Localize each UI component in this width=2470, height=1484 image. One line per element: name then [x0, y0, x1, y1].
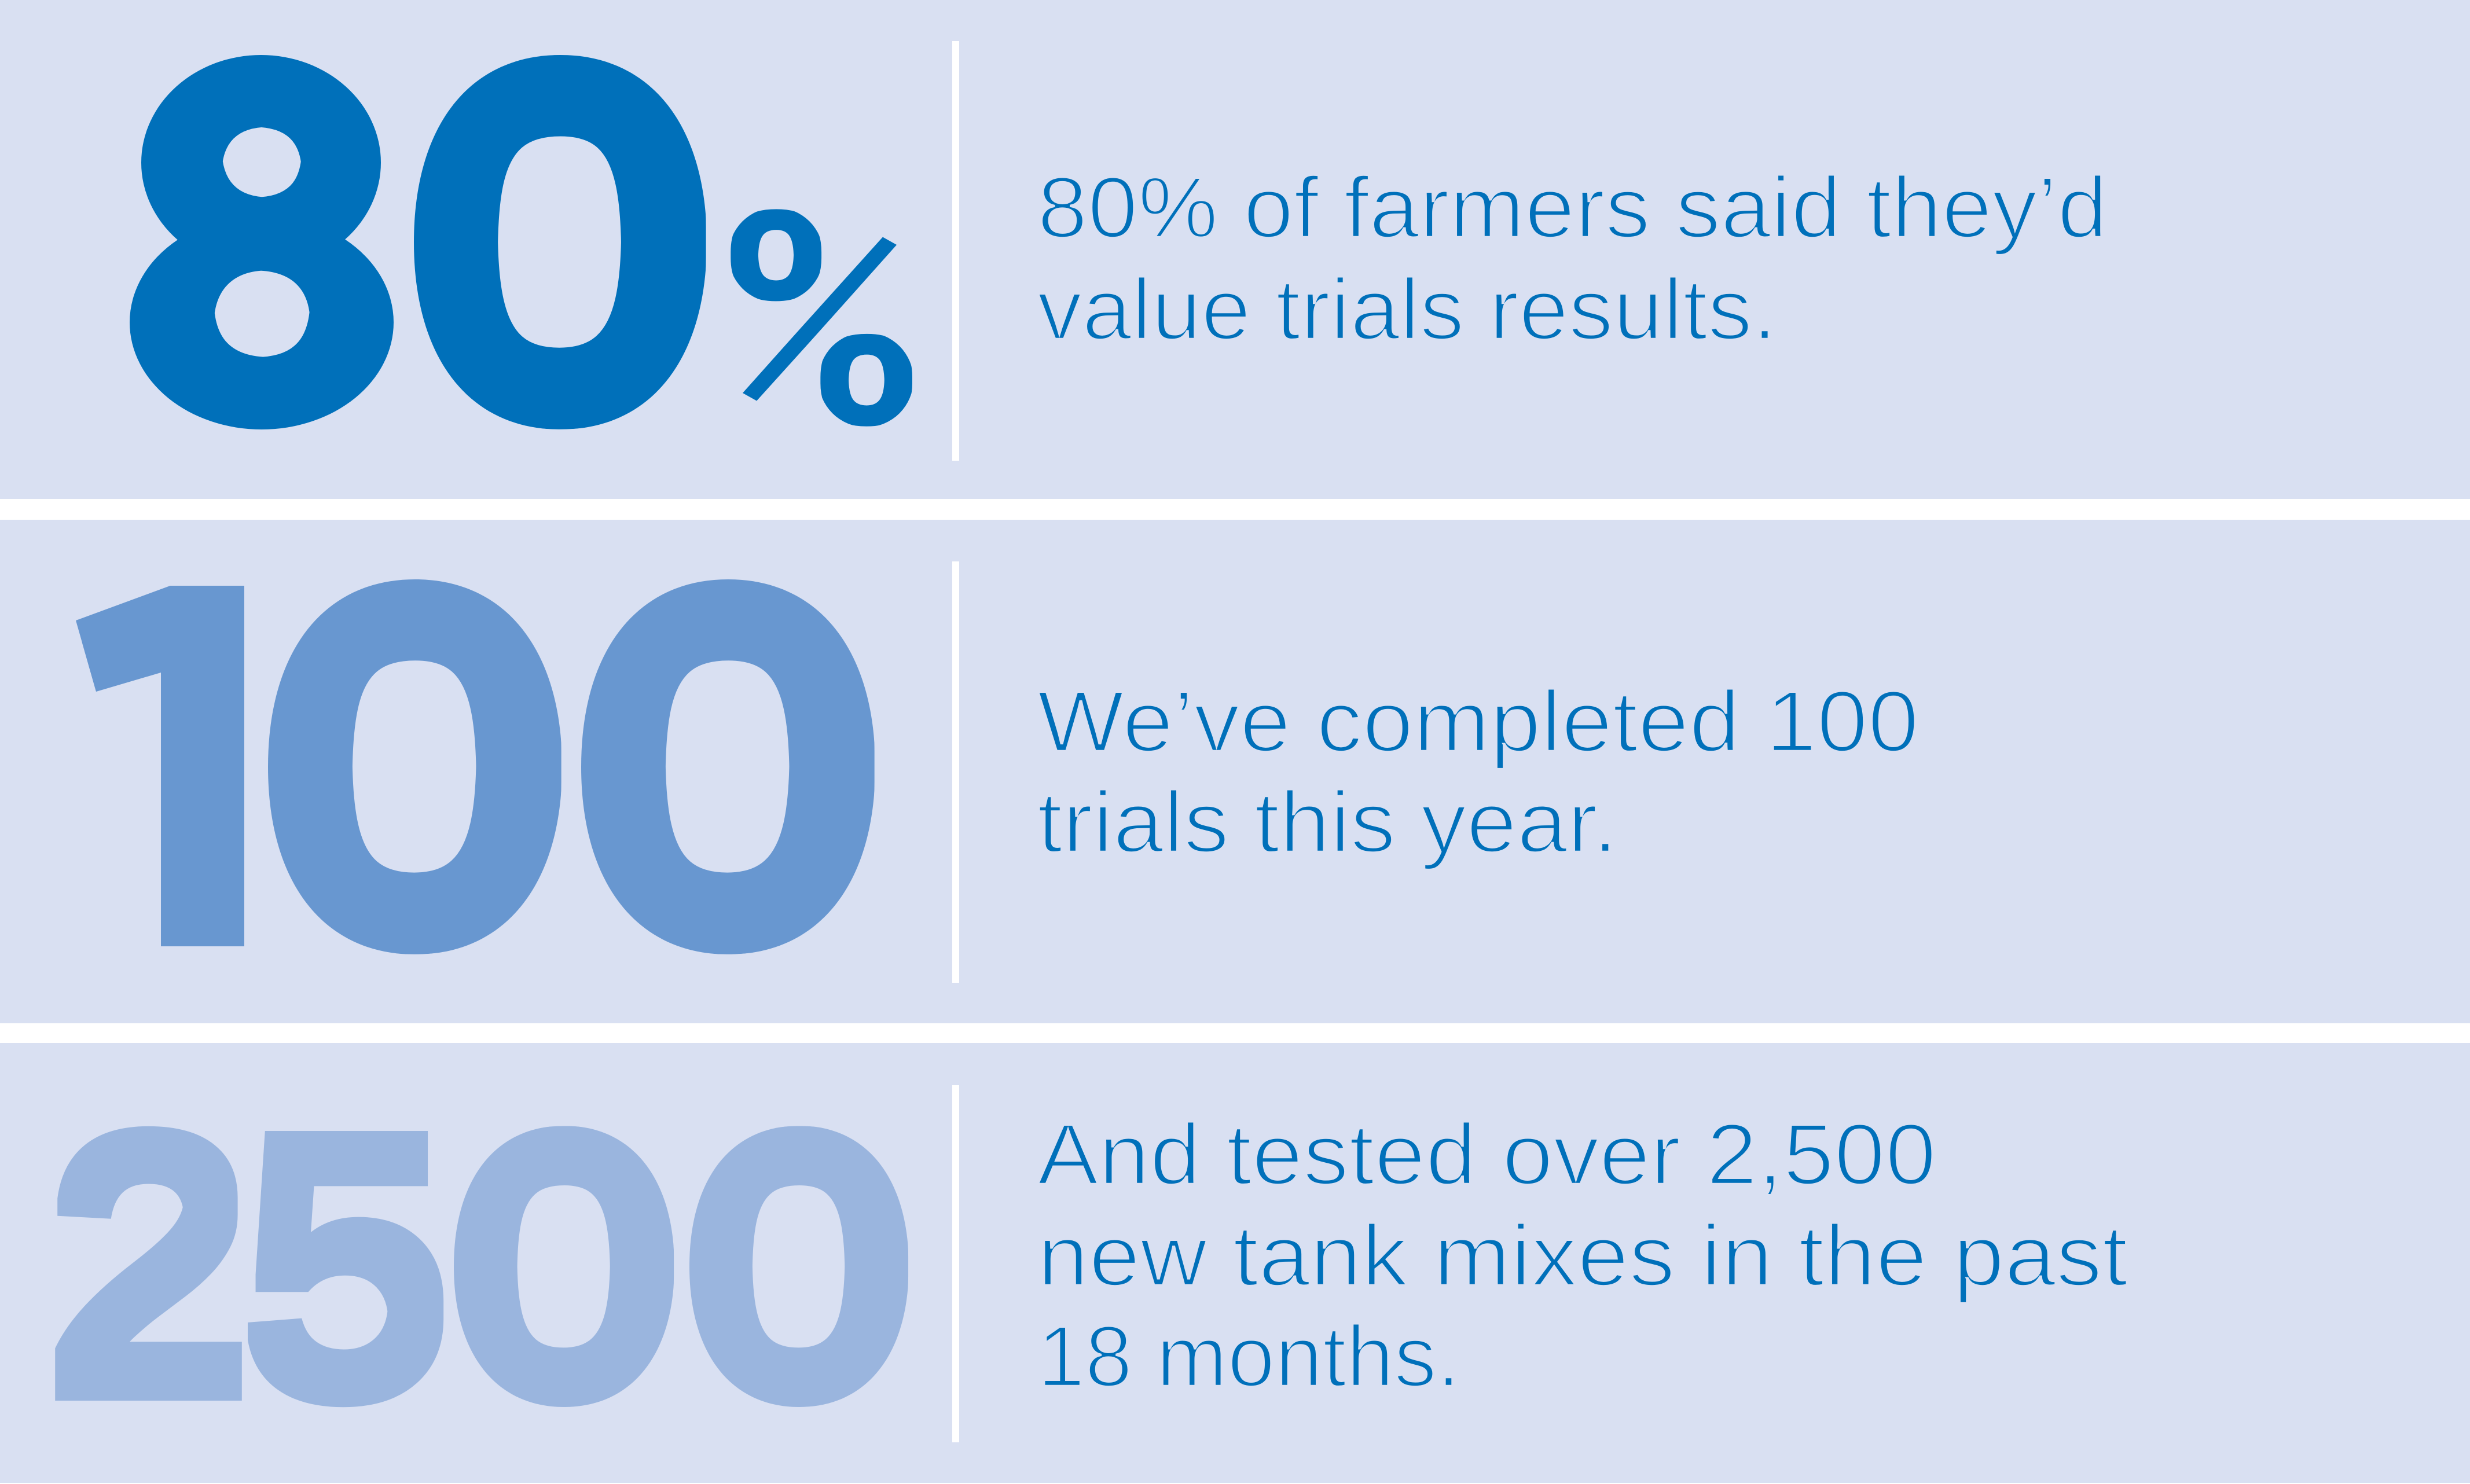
text: 2500 tank mixes description [1037, 1105, 2128, 1405]
big number: 2500: 0 [671, 1059, 927, 1472]
panel: 2500 tank mixes [0, 1043, 2470, 1483]
big number: 80%: % [671, 174, 967, 465]
big number: 100: 0 [243, 493, 586, 1039]
big number: 2500 [55, 1126, 908, 1408]
text: 80 percent description: 80% of farmers said they’d [1037, 159, 2108, 256]
big number: 80% [116, 0, 967, 518]
text: 80 percent description: value trials results. [1037, 260, 1777, 358]
big number: 100: 1 [28, 480, 359, 1056]
big number: 2500: 0 [435, 1060, 693, 1472]
text: 2500 tank mixes description: new tank mixes in the past [1037, 1207, 2128, 1304]
panel: 100 trials [0, 520, 2470, 1023]
big number: 100 [76, 579, 875, 954]
text: 80 percent description [1037, 159, 2108, 358]
big number: 2500: 2 [42, 1060, 258, 1470]
text: 2500 tank mixes description: 18 months. [1037, 1307, 1460, 1405]
text: 100 trials description: We’ve completed 100 [1037, 673, 1919, 770]
big number: 2500: 5 [236, 1060, 454, 1474]
big number: 80%: % [724, 171, 957, 391]
text: 100 trials description [1037, 673, 1919, 870]
text: 2500 tank mixes description: And tested over 2,500 [1037, 1105, 1936, 1203]
big number: 80%: % [683, 243, 919, 464]
big number: 100: 0 [556, 493, 900, 1039]
panel: 80 percent [0, 0, 2470, 518]
text: 100 trials description: trials this year. [1037, 773, 1618, 870]
